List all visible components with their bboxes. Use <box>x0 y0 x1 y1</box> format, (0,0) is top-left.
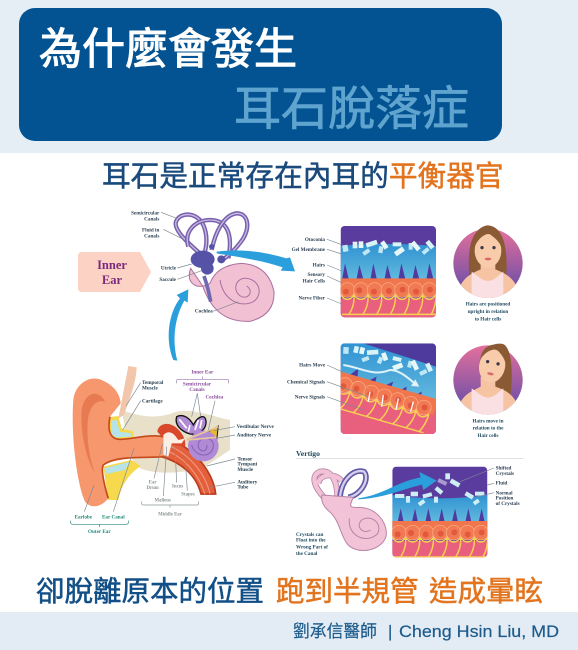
arrow to hair cell panel <box>217 250 295 271</box>
labels: moved hair cells <box>287 363 368 410</box>
inner ear labels: Semicircular <box>131 210 160 216</box>
title line 1: 為什麼會發生 <box>39 26 297 74</box>
caption: tilted: Hairs move in <box>473 418 504 424</box>
caption: tilted <box>473 418 504 439</box>
labels: normal hair cells: Otoconia <box>305 237 325 243</box>
ear labels: Tube <box>237 485 249 491</box>
cartilage <box>107 416 133 440</box>
vertigo section <box>296 451 524 558</box>
inner ear labels: Fluid in <box>142 227 159 233</box>
vertigo labels: Crystals <box>496 471 514 477</box>
title line 2: 耳石脫落症 <box>234 82 469 135</box>
caption: upright: to Hair cells <box>475 316 501 322</box>
caption: crystals float: Crystals can <box>296 532 323 538</box>
hair cell panels and portraits <box>287 225 523 444</box>
inner ear with crystals <box>314 471 386 550</box>
vertigo labels: Normal <box>496 490 513 496</box>
bone background <box>122 410 230 473</box>
vertigo labels: of Crystals <box>496 501 520 507</box>
middle ear labels: Drum <box>146 486 159 491</box>
footer band <box>0 612 578 650</box>
middle ear labels: Stapes <box>181 492 195 497</box>
labels: normal hair cells: Hairs <box>313 263 325 269</box>
ear labels: Vestibular Nerve <box>237 424 274 430</box>
author credit: Cheng Hsin Liu, MD <box>399 622 559 641</box>
caption: crystals float: the Canal <box>296 551 318 557</box>
subtitle heading: 耳石是正常存在內耳的平衡器官 <box>102 161 504 193</box>
labels: normal hair cells: Nerve Fiber <box>299 296 326 302</box>
semicircular canals <box>176 213 247 262</box>
inner ear bracket labels: Canals <box>189 387 205 393</box>
ear labels: Muscle <box>237 467 254 473</box>
middle ear labels: Middle Ear <box>158 512 183 517</box>
labels: normal hair cells: Gel Membrane <box>292 247 326 253</box>
ear labels: Tympani <box>237 462 258 468</box>
inner ear labels: Saccule <box>159 277 177 283</box>
author credit: | <box>388 622 392 641</box>
middle ear labels: Incus <box>172 485 183 490</box>
inner ear bracket labels: Inner Ear <box>191 370 214 376</box>
temporal muscle <box>118 366 137 418</box>
caption: tilted: relation to the <box>473 426 504 432</box>
inner ear labels: Canals <box>144 217 159 223</box>
ear labels: Tensor <box>237 456 253 462</box>
middle ear labels <box>142 443 199 517</box>
vertigo labels: Fluid <box>496 481 508 487</box>
outer and middle ear diagram <box>71 366 274 535</box>
crystal panel <box>392 466 488 558</box>
caption: tilted: Hair cells <box>478 433 498 439</box>
ear labels <box>123 380 274 491</box>
caption: upright: Hairs are positioned <box>466 302 510 308</box>
bottom statement <box>36 576 543 608</box>
ear labels: Auditory Nerve <box>237 432 272 438</box>
pinna and ear canal <box>73 379 163 506</box>
labels: moved hair cells: Hairs Move <box>299 363 326 369</box>
author credit: 劉承信醫師 <box>293 622 377 641</box>
ear labels: Auditory <box>237 480 258 486</box>
panel: moved hair cells <box>340 343 436 434</box>
inner ear labels: Canals <box>144 234 159 240</box>
vertigo labels: Position <box>496 496 514 502</box>
arrow to crystal panel <box>358 472 437 499</box>
panel: normal hair cells <box>340 226 436 318</box>
middle ear labels: Malleus <box>154 498 171 503</box>
caption: upright: upright in relation <box>468 309 508 315</box>
caption: upright <box>466 302 510 322</box>
header background band <box>0 0 578 153</box>
title panel <box>19 8 502 141</box>
arrow from outer ear <box>169 289 188 361</box>
ear labels: Muscle <box>142 385 158 391</box>
vertigo labels: Shifted <box>496 465 512 471</box>
inner ear labels: Cochlea <box>195 309 213 315</box>
caption: crystals float <box>296 532 328 557</box>
inner ear bracket labels: Cochlea <box>205 395 224 401</box>
middle ear labels: Ear <box>149 480 157 485</box>
labels: normal hair cells: Hair Cells <box>303 278 325 284</box>
middle ear bones <box>157 424 185 457</box>
bottom statement: 造成暈眩 <box>429 576 543 608</box>
outer ear labels: Earlobe <box>75 515 93 521</box>
inner ear labels: Utricle <box>161 265 177 271</box>
inner ear anatomy diagram <box>131 210 295 361</box>
caption: crystals float: Wrong Part of <box>296 545 328 551</box>
caption: crystals float: Float into the <box>296 538 326 544</box>
auditory tube <box>162 437 216 494</box>
outer ear labels: Outer Ear <box>88 529 111 535</box>
portrait: tilted head <box>453 342 523 417</box>
inner ear tag: Inner <box>97 258 127 272</box>
vertigo labels <box>460 465 520 507</box>
vertigo heading: Vertigo <box>296 449 320 458</box>
cochlea <box>189 263 274 321</box>
outer ear labels <box>71 448 134 535</box>
ear labels: Cartilage <box>142 399 163 405</box>
outer ear labels: Ear Canal <box>102 515 125 521</box>
inner ear tag <box>78 252 151 292</box>
bottom statement: 跑到半規管 <box>276 576 419 608</box>
labels: moved hair cells: Chemical Signals <box>287 379 325 385</box>
utricle and saccule <box>191 244 225 275</box>
bottom statement: 卻脫離原本的位置 <box>36 576 264 608</box>
inner ear bracket labels <box>177 370 229 430</box>
labels: moved hair cells: Nerve Signals <box>295 394 325 400</box>
inner ear labels <box>131 210 238 315</box>
inner ear bracket labels: Semicircular <box>183 382 212 388</box>
labels: normal hair cells: Sensory <box>308 272 325 278</box>
portrait: upright head <box>453 225 523 300</box>
labels: normal hair cells <box>292 237 342 304</box>
inner ear tag: Ear <box>102 273 123 287</box>
ear labels: Temporal <box>142 380 164 386</box>
inner ear in context <box>176 416 219 461</box>
